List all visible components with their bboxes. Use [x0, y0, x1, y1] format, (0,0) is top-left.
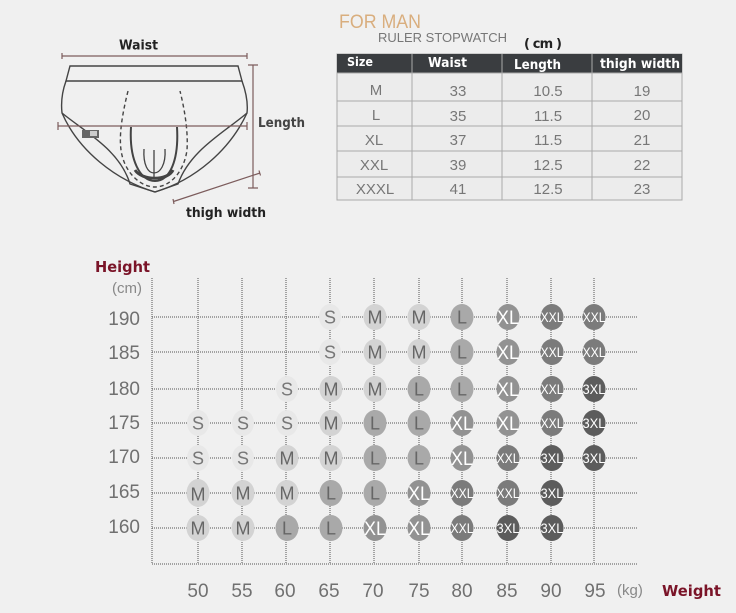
row XXL: 39 [450, 157, 466, 174]
row 160 cm sizes: L [326, 518, 336, 538]
height axis labels: 190 [108, 309, 140, 330]
table header: thigh width [600, 57, 680, 72]
unit: kg: (kg) [617, 582, 643, 599]
row 180 cm sizes: S [281, 380, 293, 400]
row 165 cm sizes: XXL [450, 485, 474, 501]
size table [337, 54, 682, 200]
row 185 cm sizes [319, 339, 606, 365]
row 180 cm sizes: M [324, 380, 338, 400]
row 160 cm sizes: L [282, 518, 292, 538]
title: FOR MAN: FOR MAN [339, 12, 421, 33]
row 180 cm sizes [276, 376, 606, 402]
row 160 cm sizes: 3XL [496, 520, 520, 536]
size grid lines [152, 278, 638, 564]
weight axis labels: 65 [318, 581, 340, 602]
row L: 11.5 [534, 108, 562, 125]
row 160 cm sizes: XL [408, 519, 430, 540]
weight axis labels: 85 [496, 581, 518, 602]
weight axis labels: 75 [408, 581, 430, 602]
row 185 cm sizes: XXL [582, 344, 606, 360]
row 180 cm sizes: XXL [540, 381, 564, 397]
height axis labels: 185 [108, 343, 140, 364]
icon: briefs outline [62, 66, 247, 192]
row 175 cm sizes: L [414, 414, 424, 434]
label: thigh width: thigh width [186, 206, 266, 221]
row 180 cm sizes: XL [497, 380, 519, 401]
row 165 cm sizes: M [190, 484, 206, 504]
row 165 cm sizes: XXL [496, 485, 520, 501]
row 190 cm sizes: M [368, 308, 382, 328]
row 175 cm sizes: XL [497, 414, 519, 435]
heading: Height: Height [95, 258, 150, 276]
row 165 cm sizes: L [370, 484, 380, 504]
row 160 cm sizes: 3XL [540, 520, 564, 536]
row XL: 21 [634, 132, 650, 149]
row 180 cm sizes: L [414, 380, 424, 400]
row XL [365, 132, 650, 149]
label: Waist: Waist [119, 38, 158, 54]
row 190 cm sizes: XXL [582, 309, 606, 325]
row 160 cm sizes [186, 515, 564, 541]
row 165 cm sizes: M [236, 484, 250, 504]
row 170 cm sizes: XXL [496, 450, 520, 466]
row 180 cm sizes: 3XL [582, 381, 606, 397]
row XL: 37 [450, 132, 466, 149]
weight axis labels: 55 [231, 581, 253, 602]
row 160 cm sizes: M [190, 518, 206, 538]
row L [372, 107, 650, 125]
table header [337, 54, 682, 73]
height axis labels: 160 [108, 517, 140, 538]
row M [370, 82, 650, 100]
table body [337, 54, 682, 200]
height axis labels: 165 [108, 482, 140, 503]
row XXXL: 23 [634, 181, 650, 198]
row XXXL: XXXL [356, 181, 394, 198]
row 170 cm sizes: 3XL [540, 450, 564, 466]
row M: M [370, 82, 382, 99]
row 185 cm sizes: M [368, 342, 382, 362]
row M: 33 [450, 83, 466, 100]
table header: Waist [428, 56, 467, 71]
heading: Weight: Weight [662, 582, 721, 600]
row 170 cm sizes: L [414, 448, 424, 468]
row 165 cm sizes: XL [408, 484, 430, 505]
row 185 cm sizes: XXL [540, 344, 564, 360]
row 165 cm sizes [186, 479, 564, 507]
row 175 cm sizes: XXL [540, 415, 564, 431]
row 190 cm sizes: S [324, 308, 336, 328]
garment diagram with measurements [58, 38, 305, 221]
unit: cm: ( cm ) [524, 37, 562, 52]
row 185 cm sizes: XL [497, 343, 519, 364]
table header: Length [514, 58, 561, 73]
row 175 cm sizes [187, 410, 606, 436]
row XXL: XXL [360, 157, 388, 174]
row 170 cm sizes [187, 445, 606, 471]
height axis labels: 180 [108, 379, 140, 400]
row 160 cm sizes: XL [364, 519, 386, 540]
weight axis labels: 60 [274, 581, 296, 602]
height axis labels [108, 309, 140, 538]
weight axis labels: 70 [362, 581, 384, 602]
row L: 35 [450, 108, 466, 125]
row M: 10.5 [533, 83, 563, 100]
row XL: XL [365, 132, 383, 149]
row L: L [372, 107, 380, 124]
weight axis labels: 80 [451, 581, 473, 602]
row 160 cm sizes: M [236, 518, 250, 538]
row XXL: 12.5 [533, 157, 563, 174]
row 185 cm sizes: S [324, 342, 336, 362]
row 165 cm sizes: 3XL [540, 485, 564, 501]
row 175 cm sizes: S [192, 414, 204, 434]
row 190 cm sizes: XL [497, 308, 519, 329]
measure lines [58, 53, 260, 204]
row 165 cm sizes: M [280, 484, 294, 504]
row 175 cm sizes: M [324, 414, 338, 434]
row 190 cm sizes: M [412, 308, 426, 328]
row XXL [360, 157, 650, 174]
row 180 cm sizes: L [457, 380, 467, 400]
row 190 cm sizes: XXL [540, 309, 564, 325]
row 170 cm sizes: M [280, 448, 294, 468]
row 190 cm sizes: L [457, 308, 467, 328]
height axis labels: 170 [108, 447, 140, 468]
row XXXL [356, 181, 650, 198]
row 165 cm sizes: L [326, 484, 336, 504]
row 160 cm sizes: XXL [450, 520, 474, 536]
row 185 cm sizes: M [412, 342, 426, 362]
row 170 cm sizes: M [324, 448, 338, 468]
row 170 cm sizes: XL [451, 449, 473, 470]
row XL: 11.5 [534, 132, 562, 149]
row 175 cm sizes: L [370, 414, 380, 434]
row 190 cm sizes [319, 304, 606, 330]
row 170 cm sizes: S [237, 448, 249, 468]
row 175 cm sizes: 3XL [582, 415, 606, 431]
row 170 cm sizes: L [370, 448, 380, 468]
row 175 cm sizes: S [237, 414, 249, 434]
row 170 cm sizes: 3XL [582, 450, 606, 466]
row L: 20 [634, 107, 650, 124]
icon: garment label [82, 130, 99, 138]
row 175 cm sizes: XL [451, 414, 473, 435]
weight axis labels: 90 [540, 581, 562, 602]
weight axis labels: 50 [187, 581, 209, 602]
row 180 cm sizes: M [368, 380, 382, 400]
row 175 cm sizes: S [281, 414, 293, 434]
unit: cm: (cm) [112, 280, 142, 297]
row XXL: 22 [634, 157, 650, 174]
row 185 cm sizes: L [457, 342, 467, 362]
weight axis labels: 95 [584, 581, 606, 602]
weight axis labels [187, 581, 606, 602]
label: Length: Length [258, 116, 305, 131]
height axis labels: 175 [108, 413, 140, 434]
row M: 19 [634, 83, 650, 100]
row XXXL: 41 [450, 181, 466, 198]
table header: Size [347, 54, 373, 69]
row XXXL: 12.5 [533, 181, 563, 198]
row 170 cm sizes: S [192, 448, 204, 468]
subtitle: RULER STOPWATCH: RULER STOPWATCH [378, 30, 507, 45]
